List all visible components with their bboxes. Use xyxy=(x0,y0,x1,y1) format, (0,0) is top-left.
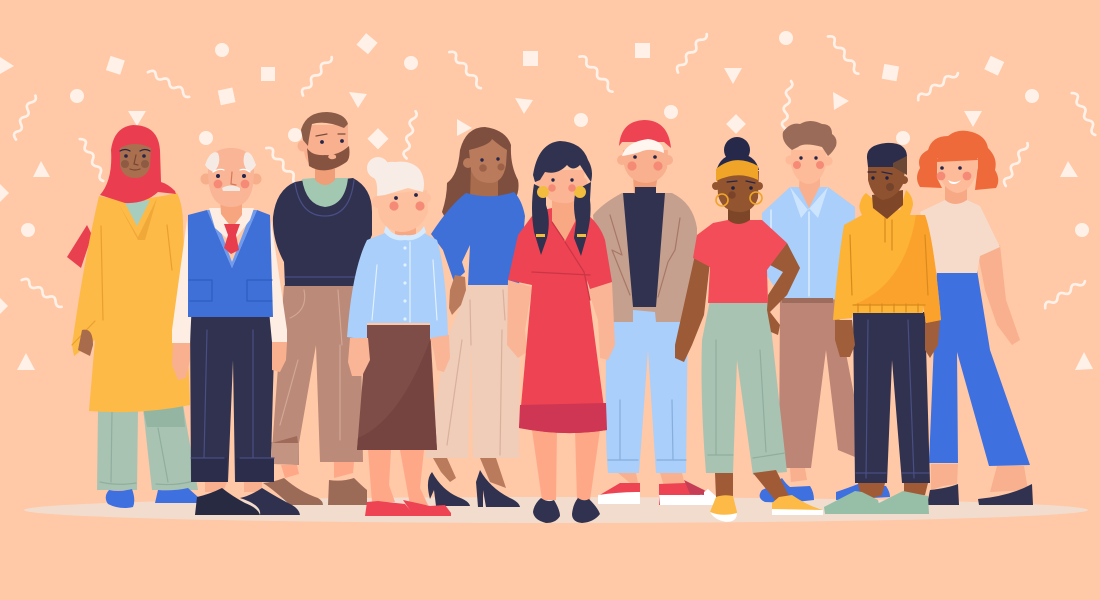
person: bearded man in navy sweater xyxy=(263,112,372,505)
person: elderly woman in light blue blouse xyxy=(347,157,451,516)
person: curly-haired man in light blue shirt xyxy=(760,121,890,502)
person: woman in blue top xyxy=(425,127,525,507)
person: young man in yellow hoodie xyxy=(824,143,941,514)
person: young woman in red dress with braids xyxy=(507,141,615,523)
confetti pattern xyxy=(0,31,1098,370)
ground ellipse xyxy=(24,497,1088,523)
person: woman in red hijab xyxy=(67,125,198,508)
person: red-haired woman in cream tee xyxy=(917,131,1033,505)
person: elderly man in blue vest xyxy=(172,148,300,515)
person: woman in coral tee with yellow headband xyxy=(675,137,823,522)
person: man with red beanie and tan blazer xyxy=(593,120,718,505)
